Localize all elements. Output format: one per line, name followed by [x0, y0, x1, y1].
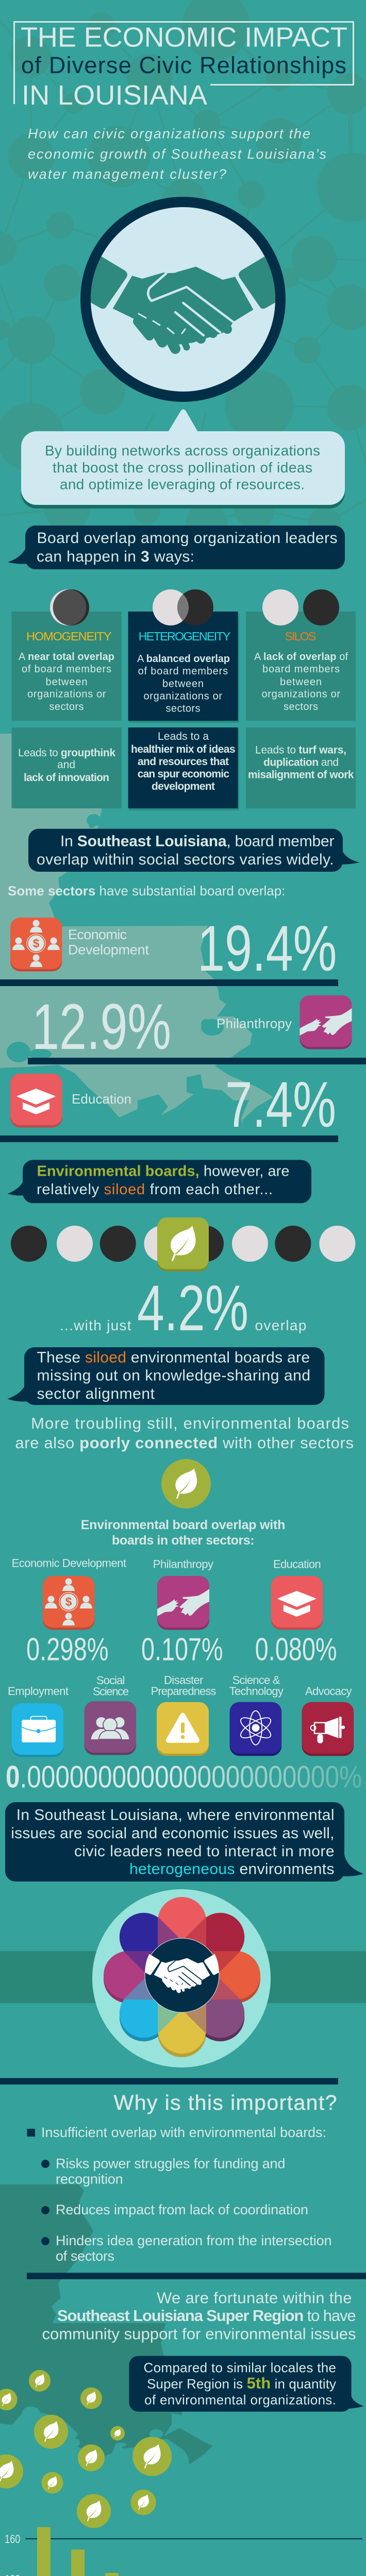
band behind flower — [0, 1951, 366, 2003]
callout: 5th in quantity: Compared to similar locales the — [143, 2360, 336, 2375]
text: poorly connected — [15, 1414, 354, 1452]
callout: heterogeneous environments — [5, 1802, 364, 1882]
sector: economic development overlap: 0.298% — [26, 1632, 109, 1667]
sector: science and technology — [229, 1674, 284, 1756]
title frame — [14, 22, 354, 104]
y axis labels: 160 — [5, 2532, 20, 2546]
sector: disaster preparedness — [151, 1674, 216, 1756]
panel: homogeneity definition: of board members — [22, 664, 111, 675]
bar divider — [27, 2273, 366, 2279]
sector: employment — [8, 1685, 69, 1757]
sector: philanthropy overlap: Philanthropy — [153, 1558, 213, 1571]
callout: environmental boards — [7, 1160, 311, 1203]
panel: heterogeneity definition: organizations or — [143, 690, 222, 702]
text: community support: Southeast Louisiana Super Region to have — [57, 2307, 356, 2325]
panel: homogeneity definition: A near total overlap — [19, 651, 114, 663]
icon: philanthropy — [157, 1576, 209, 1630]
sector: science and technology: Technology — [229, 1685, 284, 1698]
sector: disaster preparedness: Disaster — [164, 1674, 203, 1687]
chart heading: Environmental board overlap with — [81, 1518, 285, 1532]
bullet: hinders idea generation: Hinders idea generation from the intersection — [56, 2233, 332, 2248]
callout: heterogeneous environments: In Southeast Louisiana, where environmental — [16, 1807, 334, 1824]
panel: silos definition: SILOS — [285, 630, 317, 643]
venn: silos — [262, 589, 339, 625]
panel: homogeneity definition: between — [45, 676, 88, 688]
background network pattern — [0, 0, 366, 544]
sector: advocacy — [302, 1685, 354, 1756]
sector: social science — [85, 1674, 136, 1755]
callout: siloed boards: sector alignment — [37, 1385, 155, 1402]
panel: homogeneity definition: HOMOGENEITY — [26, 630, 112, 643]
icon: people — [85, 1701, 136, 1755]
stat: philanthropy: 12.9% — [32, 991, 171, 1063]
dots: siloed boards — [11, 1226, 355, 1262]
sector: social science: Science — [93, 1685, 129, 1698]
icon: education — [10, 1074, 62, 1127]
intro question — [28, 126, 326, 182]
heading: why is this important: Why is this important? — [114, 2091, 337, 2114]
text: poorly connected: More troubling still, environmental boards — [31, 1414, 349, 1432]
panel: heterogeneity definition: HETEROGENEITY — [139, 630, 231, 643]
sectors intro text: Some sectors have substantial board overlap: — [8, 883, 285, 899]
panel: silos definition: A lack of overlap of — [254, 651, 348, 663]
panel: heterogeneity outcome: can spur economic — [138, 768, 229, 780]
sector: education overlap: Education — [273, 1558, 321, 1571]
stat: economic development: Economic — [68, 927, 127, 942]
chart heading: boards in other sectors: — [112, 1533, 255, 1548]
panel: silos outcome: misalignment of work — [248, 769, 354, 781]
callout: board overlap — [8, 526, 345, 569]
icon: economic development — [43, 1576, 95, 1630]
text: community support: We are fortunate within the — [157, 2289, 352, 2307]
stat: education: Education — [72, 1091, 131, 1107]
bullet: risks power struggles — [41, 2156, 285, 2187]
title — [21, 22, 347, 111]
stat: philanthropy — [32, 991, 352, 1063]
callout: building networks: By building networks across organizations — [45, 443, 320, 459]
intro question: economic growth of Southeast Louisiana’s — [28, 146, 326, 162]
icon: environment — [157, 1217, 209, 1272]
panel: silos definition: sectors — [284, 701, 318, 713]
text: community support — [42, 2289, 356, 2343]
intro question: How can civic organizations support the — [28, 126, 310, 142]
text: community support: community support for environmental issues — [42, 2325, 356, 2343]
map: Louisiana coast light — [0, 734, 273, 1126]
stat: environmental overlap — [60, 1273, 306, 1344]
sector: economic development overlap — [12, 1557, 126, 1667]
panel: silos definition: board members — [262, 664, 340, 675]
bar divider — [0, 1136, 338, 1142]
stat: environmental overlap: overlap — [255, 1317, 306, 1333]
callout: building networks — [21, 409, 345, 509]
stat: economic development: Development — [68, 942, 149, 958]
panel: heterogeneity definition — [128, 612, 239, 723]
sector: economic development overlap: Economic Development — [12, 1557, 126, 1570]
callout: board overlap: can happen in 3 ways: — [37, 548, 194, 565]
icon: leaf circle — [161, 1459, 211, 1509]
environmental organization markers — [0, 2370, 172, 2528]
icon: atom — [230, 1702, 281, 1756]
panel: heterogeneity outcome: and resources that — [138, 756, 229, 768]
panel: heterogeneity definition: sectors — [166, 703, 200, 715]
callout: siloed boards: missing out on knowledge-sharing and — [37, 1367, 310, 1384]
bullet: risks power struggles: Risks power struggles for funding and — [56, 2156, 285, 2172]
callout: 5th in quantity — [129, 2356, 364, 2412]
callout: heterogeneous environments: civic leaders need to interact in more — [74, 1843, 334, 1860]
panel: heterogeneity outcome — [128, 727, 239, 810]
icon: warning — [157, 1702, 209, 1756]
panel: silos definition: organizations or — [262, 688, 340, 700]
y axis labels — [5, 2532, 20, 2576]
icon: economic development — [10, 918, 62, 972]
callout: Southeast Louisiana: overlap within social sectors varies widely. — [37, 851, 334, 868]
sector: social science: Social — [96, 1674, 125, 1687]
bar divider — [28, 1058, 366, 1064]
list: consequences: Insufficient overlap with environmental boards: — [41, 2125, 326, 2140]
bar divider — [0, 979, 338, 986]
callout: 5th in quantity: Super Region is 5th in quantity — [147, 2374, 336, 2392]
callout: board overlap: Board overlap among organization leaders — [37, 530, 337, 547]
panel: silos outcome: Leads to turf wars, — [255, 744, 346, 756]
title: THE ECONOMIC IMPACT — [21, 22, 347, 53]
panel: homogeneity outcome — [12, 727, 122, 808]
stat: education — [10, 1069, 336, 1141]
map lakes — [22, 2406, 163, 2447]
venn: heterogeneity — [153, 589, 213, 625]
bullet: reduces impact: Reduces impact from lack of coordination — [56, 2202, 308, 2217]
callout: environmental boards: Environmental boards, however, are — [37, 1163, 290, 1179]
panel: heterogeneity outcome: development — [152, 781, 215, 792]
icon: briefcase — [12, 1703, 63, 1757]
intro question: water management cluster? — [28, 166, 226, 182]
sector: education overlap — [255, 1558, 337, 1667]
icon: handshake in circle — [85, 202, 281, 397]
panel: heterogeneity outcome: healthier mix of ideas — [131, 743, 235, 755]
callout: siloed boards — [7, 1347, 325, 1405]
callout: heterogeneous environments: issues are social and economic issues as well, — [11, 1825, 335, 1842]
bar chart: environmental organizations by city — [5, 2527, 362, 2576]
panel: homogeneity outcome: lack of innovation — [24, 772, 109, 784]
panel: homogeneity outcome: and — [57, 759, 75, 771]
icon: philanthropy — [300, 995, 352, 1049]
list: consequences — [27, 2125, 332, 2264]
panel: heterogeneity definition: of board members — [138, 666, 228, 677]
bullet: hinders idea generation — [41, 2233, 332, 2264]
panel: homogeneity definition — [12, 612, 122, 721]
panel: silos definition — [246, 612, 356, 721]
stat: philanthropy: Philanthropy — [217, 1016, 292, 1031]
bars — [37, 2527, 356, 2576]
map: Louisiana coast dark — [0, 2184, 213, 2465]
bullet square — [27, 2129, 35, 2137]
callout: 5th in quantity: of environmental organizations. — [144, 2392, 336, 2408]
panel: heterogeneity definition: A balanced overlap — [137, 653, 230, 665]
panel: heterogeneity outcome: Leads to a — [158, 731, 209, 742]
panel: homogeneity definition: sectors — [49, 701, 84, 713]
bullet: risks power struggles: recognition — [56, 2171, 123, 2187]
sector: philanthropy overlap: 0.107% — [141, 1632, 223, 1667]
icon: education — [271, 1576, 323, 1630]
panel: homogeneity outcome: Leads to groupthink — [18, 747, 115, 759]
sector: philanthropy overlap — [141, 1558, 223, 1667]
stat: economic development — [10, 913, 337, 985]
panel: silos outcome: duplication and — [263, 756, 339, 769]
title: IN LOUISIANA — [22, 80, 207, 111]
icon: sector flower with handshake — [92, 1889, 271, 2067]
stat: environmental overlap: 4.2% — [137, 1273, 248, 1344]
text: poorly connected: are also poorly connected with other sectors — [15, 1434, 354, 1452]
icon: megaphone — [302, 1702, 354, 1756]
sector: disaster preparedness: Preparedness — [151, 1685, 216, 1698]
callout: siloed boards: These siloed environmental boards are — [37, 1349, 310, 1366]
panel: heterogeneity definition: between — [162, 678, 204, 689]
panel: homogeneity definition: organizations or — [27, 688, 106, 700]
callout: environmental boards: relatively siloed from each other... — [37, 1181, 273, 1198]
sector: science and technology: Science & — [232, 1674, 280, 1687]
map lakes — [7, 814, 224, 1062]
bar divider — [0, 2078, 338, 2084]
chart heading — [81, 1518, 285, 1548]
sector: employment: Employment — [8, 1685, 69, 1698]
panel: silos definition: between — [280, 676, 322, 688]
stat: environmental overlap: ...with just — [60, 1317, 131, 1333]
sector: advocacy: Advocacy — [305, 1685, 352, 1698]
title: of Diverse Civic Relationships — [21, 52, 346, 78]
callout: building networks: that boost the cross pollination of ideas — [53, 460, 312, 476]
callout: Southeast Louisiana: In Southeast Louisiana, board member — [60, 833, 334, 850]
venn: homogeneity — [50, 589, 89, 625]
callout: Southeast Louisiana — [28, 829, 360, 872]
callout: heterogeneous environments: heterogeneous environments — [129, 1861, 334, 1877]
bullet: hinders idea generation: of sectors — [56, 2248, 114, 2264]
panel: silos outcome — [246, 727, 356, 808]
callout: building networks: and optimize leveraging of resources. — [60, 476, 305, 493]
sector: education overlap: 0.080% — [255, 1632, 337, 1667]
